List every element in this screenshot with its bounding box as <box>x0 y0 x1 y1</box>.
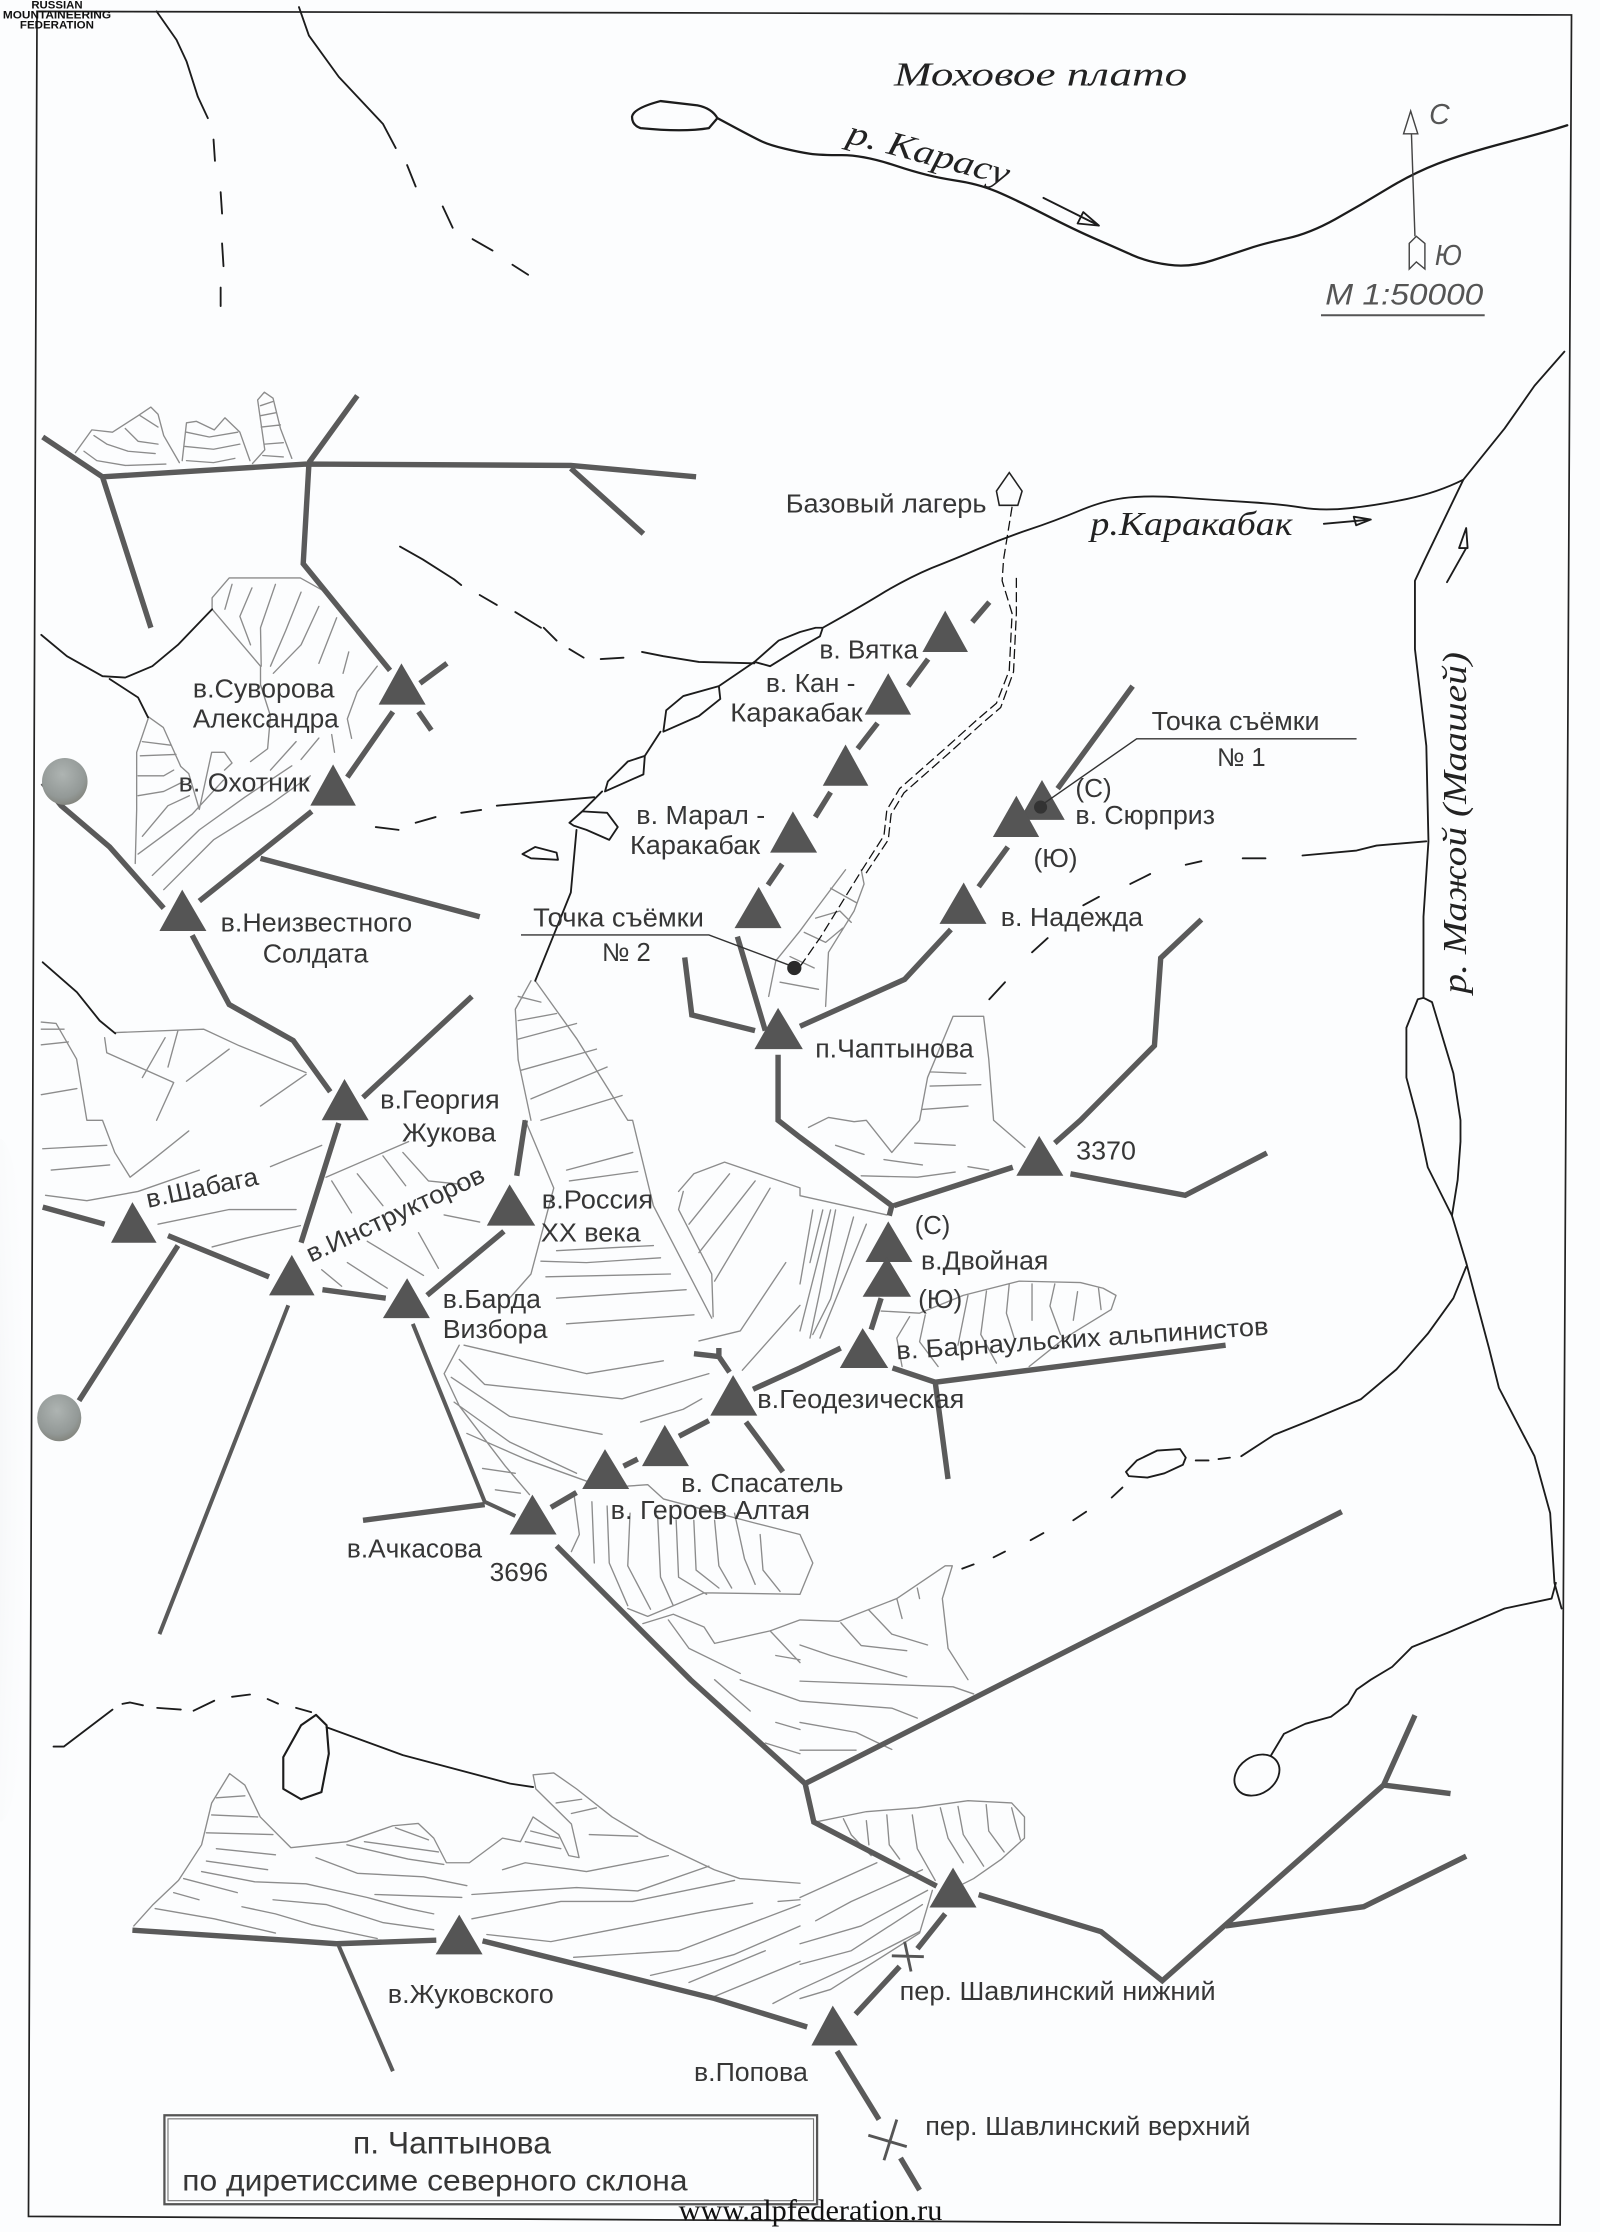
binder hole: lower <box>37 1394 81 1441</box>
callout: survey point 2: Точка съёмки <box>533 905 704 933</box>
peak: Zhukovsky <box>388 1915 554 2009</box>
logo: Russian Mountaineering Federation: MOUNTAINEERING <box>3 10 111 22</box>
peak: 3370 <box>1016 1136 1136 1176</box>
peak: Nadezhda <box>940 883 1144 932</box>
peak: Chaptynov <box>754 1008 974 1064</box>
peak: Syurpriz (north and south): в. Сюрприз <box>1075 802 1215 830</box>
peak: Zhukovsky: в.Жуковского <box>388 1981 554 2009</box>
label: lower Shavlinsky pass: пер. Шавлинский нижний <box>900 1978 1216 2006</box>
peak: Maral-Karakabak: в. Марал - <box>636 802 765 830</box>
peak: 3370: 3370 <box>1076 1138 1136 1166</box>
compass: north-south arrow: С <box>1429 99 1450 131</box>
mountain ridges <box>43 396 1466 2190</box>
binder hole: upper <box>42 758 88 805</box>
peak: Okhotnik: в. Охотник <box>179 769 310 797</box>
logo: Russian Mountaineering Federation: FEDERATION <box>20 19 94 31</box>
compass: north-south arrow: Ю <box>1435 240 1462 272</box>
peak: Bard Vizbor: в.Барда <box>443 1286 542 1314</box>
peak: Achkasov 3696: 3696 <box>490 1559 548 1587</box>
title box: п. Чаптынова <box>353 2126 551 2161</box>
peak: Geodetic <box>710 1375 964 1416</box>
peak: Syurpriz (north and south): (С) <box>1075 775 1112 803</box>
peak: unnamed above pass <box>735 887 781 928</box>
peak: Syurpriz (north and south) <box>993 775 1215 873</box>
peak: Bard Vizbor: Визбора <box>443 1316 548 1344</box>
peak: Kan-Karakabak <box>730 670 911 728</box>
title box: по диретиссиме северного склона <box>182 2165 688 2198</box>
peak: Shabaga <box>111 1163 262 1243</box>
callout: survey point 1: № 1 <box>1217 744 1266 772</box>
peak: Heroes of Altai: в. Героев Алтая <box>611 1497 810 1525</box>
peak: Vyatka <box>819 611 968 664</box>
scale: M 1:50000: М 1:50000 <box>1325 279 1484 312</box>
peak: Achkasov 3696: в.Ачкасова <box>347 1535 483 1563</box>
peak: Suvorov Alexander: в.Суворова <box>193 675 335 703</box>
peak: Russia XX century: в.Россия <box>542 1187 653 1215</box>
peak: unnamed southeast <box>930 1868 977 1907</box>
rivers, streams and lakes <box>41 7 1567 1804</box>
label: upper Shavlinsky pass: пер. Шавлинский верхний <box>925 2113 1251 2141</box>
base camp trail: double dashed line <box>800 507 1016 967</box>
peak: Shabaga: в.Шабага <box>144 1163 262 1214</box>
river label: Karasu: р. Карасу <box>841 114 1015 193</box>
compass: north-south arrow <box>1404 99 1462 272</box>
peak: Syurpriz (north and south): (Ю) <box>1033 845 1078 873</box>
peak: Kan-Karakabak: Каракабак <box>730 700 863 728</box>
peak: Achkasov 3696 <box>347 1495 557 1587</box>
icon: base camp <box>996 473 1022 505</box>
arrows: river flow direction <box>1043 198 1468 582</box>
peak: Okhotnik <box>179 764 356 806</box>
callout: survey point 1 <box>1034 708 1357 814</box>
peak: Bard Vizbor <box>383 1278 548 1344</box>
peak: unnamed on Vyatka ridge <box>823 744 868 786</box>
peak: Popov <box>694 2006 858 2087</box>
peak: Georgy Zhukov <box>322 1079 500 1148</box>
callout: survey point 1: Точка съёмки <box>1152 708 1320 736</box>
peak: Kan-Karakabak: в. Кан - <box>766 670 856 698</box>
peak: Vyatka: в. Вятка <box>819 636 919 664</box>
peak: Nadezhda: в. Надежда <box>1001 904 1144 932</box>
peak: Suvorov Alexander <box>193 663 426 733</box>
peak: Instructors: в.Инструкторов <box>302 1161 489 1268</box>
peak: Dvoynaya (north and south): в.Двойная <box>921 1248 1048 1276</box>
river label: Mazhoy: р. Мажой (Маашей) <box>1437 652 1474 996</box>
glaciers: contour hatching <box>41 392 1116 2004</box>
logo: Russian Mountaineering Federation <box>3 0 111 31</box>
callout: survey point 2: № 2 <box>602 939 651 967</box>
peak: Georgy Zhukov: в.Георгия <box>380 1086 500 1114</box>
heading: Mokhovoe plateau: Моховое плато <box>893 56 1187 93</box>
peak: Maral-Karakabak <box>630 802 817 860</box>
title box <box>164 2115 817 2204</box>
label: base camp: Базовый лагерь <box>786 490 986 518</box>
peak: Geodetic: в.Геодезическая <box>757 1386 964 1414</box>
peak: Spasatel <box>642 1425 843 1498</box>
peak: Maral-Karakabak: Каракабак <box>630 832 761 860</box>
peak: Chaptynov: п.Чаптынова <box>815 1036 974 1064</box>
peak: Unknown Soldier: Солдата <box>263 940 369 968</box>
peak: Dvoynaya (north and south): (С) <box>915 1212 950 1240</box>
peak: Suvorov Alexander: Александра <box>193 705 340 733</box>
peak: Russia XX century <box>487 1184 653 1247</box>
peak: Barnaul climbers: в. Барнаульских альпинистов <box>895 1313 1269 1365</box>
peak: Spasatel: в. Спасатель <box>681 1470 843 1498</box>
river label: Karakabak: р.Каракабак <box>1088 506 1294 543</box>
callout: survey point 2 <box>521 905 801 975</box>
peak: Heroes of Altai <box>582 1449 810 1525</box>
peak: Unknown Soldier: в.Неизвестного <box>221 910 412 938</box>
peak: Georgy Zhukov: Жукова <box>402 1120 497 1148</box>
peak: Dvoynaya (north and south) <box>863 1212 1048 1314</box>
peak: Dvoynaya (north and south): (Ю) <box>918 1286 962 1314</box>
peak: Russia XX century: XX века <box>541 1219 641 1247</box>
peak: Popov: в.Попова <box>694 2059 809 2087</box>
footer: website: www.alpfederation.ru <box>679 2194 942 2227</box>
pass marks <box>868 1942 924 2160</box>
peak: Unknown Soldier <box>159 890 412 968</box>
peak: Instructors <box>269 1161 489 1295</box>
